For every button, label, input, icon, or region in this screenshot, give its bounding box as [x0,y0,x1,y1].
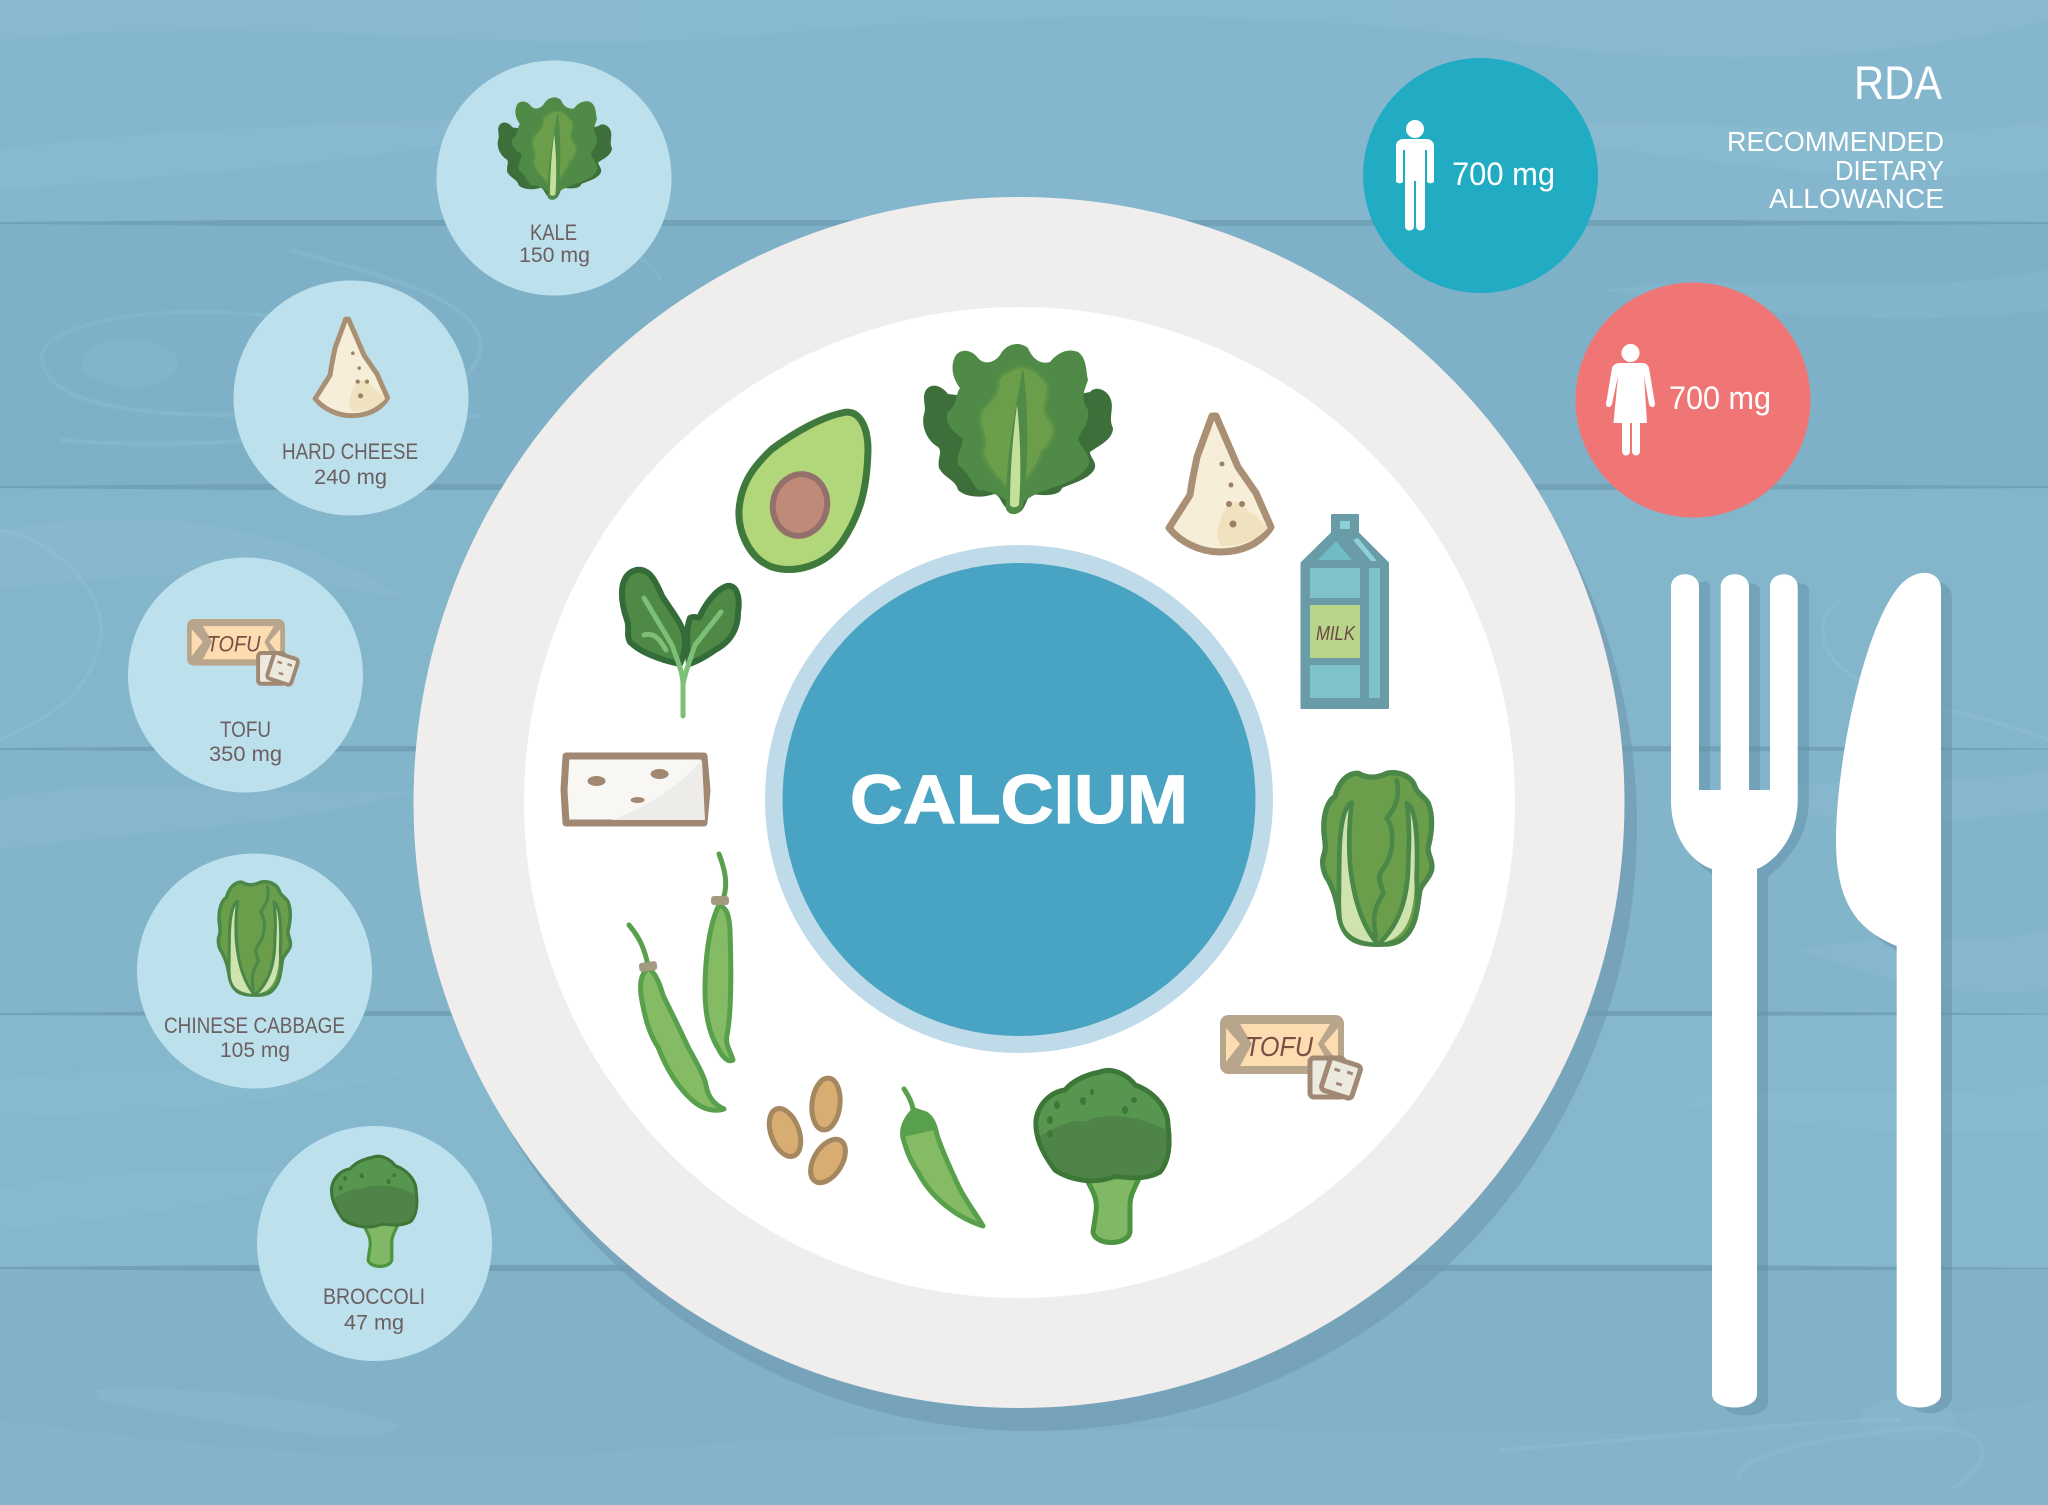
fork shadow [1682,580,1809,1416]
milk label: MILK [1316,623,1356,645]
value: hard cheese: 240 mg [314,466,387,489]
food: almonds [763,1077,853,1189]
food: milk carton [1302,515,1388,708]
food: green beans [629,854,733,1110]
label: broccoli: BROCCOLI [323,1284,425,1309]
icon: broccoli [332,1156,417,1266]
circle: male RDA [1363,58,1598,293]
value: male RDA: 700 mg [1452,156,1555,192]
value: chinese cabbage: 105 mg [220,1039,290,1062]
food: tofu block [564,756,707,823]
plate rim [414,197,1624,1408]
circle: female RDA [1576,282,1810,518]
heading: calcium: CALCIUM [850,761,1188,838]
text: recommended dietary allowance [1727,126,1944,214]
food: tofu package: TOFU [1245,1031,1314,1062]
circle: chinese cabbage [137,854,372,1088]
right bean [719,854,726,902]
food: avocado [739,412,868,569]
label: hard cheese: HARD CHEESE [282,439,418,464]
calcium centre badge [765,545,1273,1053]
food: large kale [923,344,1113,514]
value: broccoli: 47 mg [344,1312,404,1334]
value: female RDA: 700 mg [1669,380,1771,416]
label: chinese cabbage: CHINESE CABBAGE [164,1013,345,1038]
icon: woman [1606,344,1655,456]
icon: chinese cabbage [218,882,290,995]
circle: broccoli [257,1126,492,1361]
icon: tofu [190,622,299,685]
circle: hard cheese [234,280,468,516]
circle: kale [436,60,672,296]
icon: tofu: TOFU [207,631,261,656]
food: large hard cheese [1169,416,1271,552]
fork body [1671,574,1798,1408]
food: tofu package [1224,1018,1361,1099]
text: recommended dietary allowance: ALLOWANCE [1769,183,1944,214]
text: recommended dietary allowance: DIETARY [1835,155,1944,186]
plate shadow [427,221,1637,1431]
left bean [629,925,648,966]
value: tofu: 350 mg [209,743,282,766]
icon: kale [498,97,612,200]
icon: hard cheese [315,319,388,416]
plate [414,197,1637,1431]
text: recommended dietary allowance: RECOMMENDED [1727,126,1944,157]
circle: tofu [128,558,363,792]
fork [1671,574,1809,1416]
plate centre [524,307,1515,1298]
knife [1836,573,1952,1414]
label: kale: KALE [530,220,577,245]
food: okra [903,1089,983,1226]
icon: man [1396,120,1434,230]
label: tofu: TOFU [220,717,271,742]
knife body [1836,573,1941,1408]
food: spinach [622,570,739,716]
knife shadow [1847,582,1952,1414]
food: large broccoli [1036,1070,1169,1242]
heading: RDA: RDA [1854,56,1943,109]
value: kale: 150 mg [519,244,590,267]
food: large chinese cabbage [1323,773,1432,944]
